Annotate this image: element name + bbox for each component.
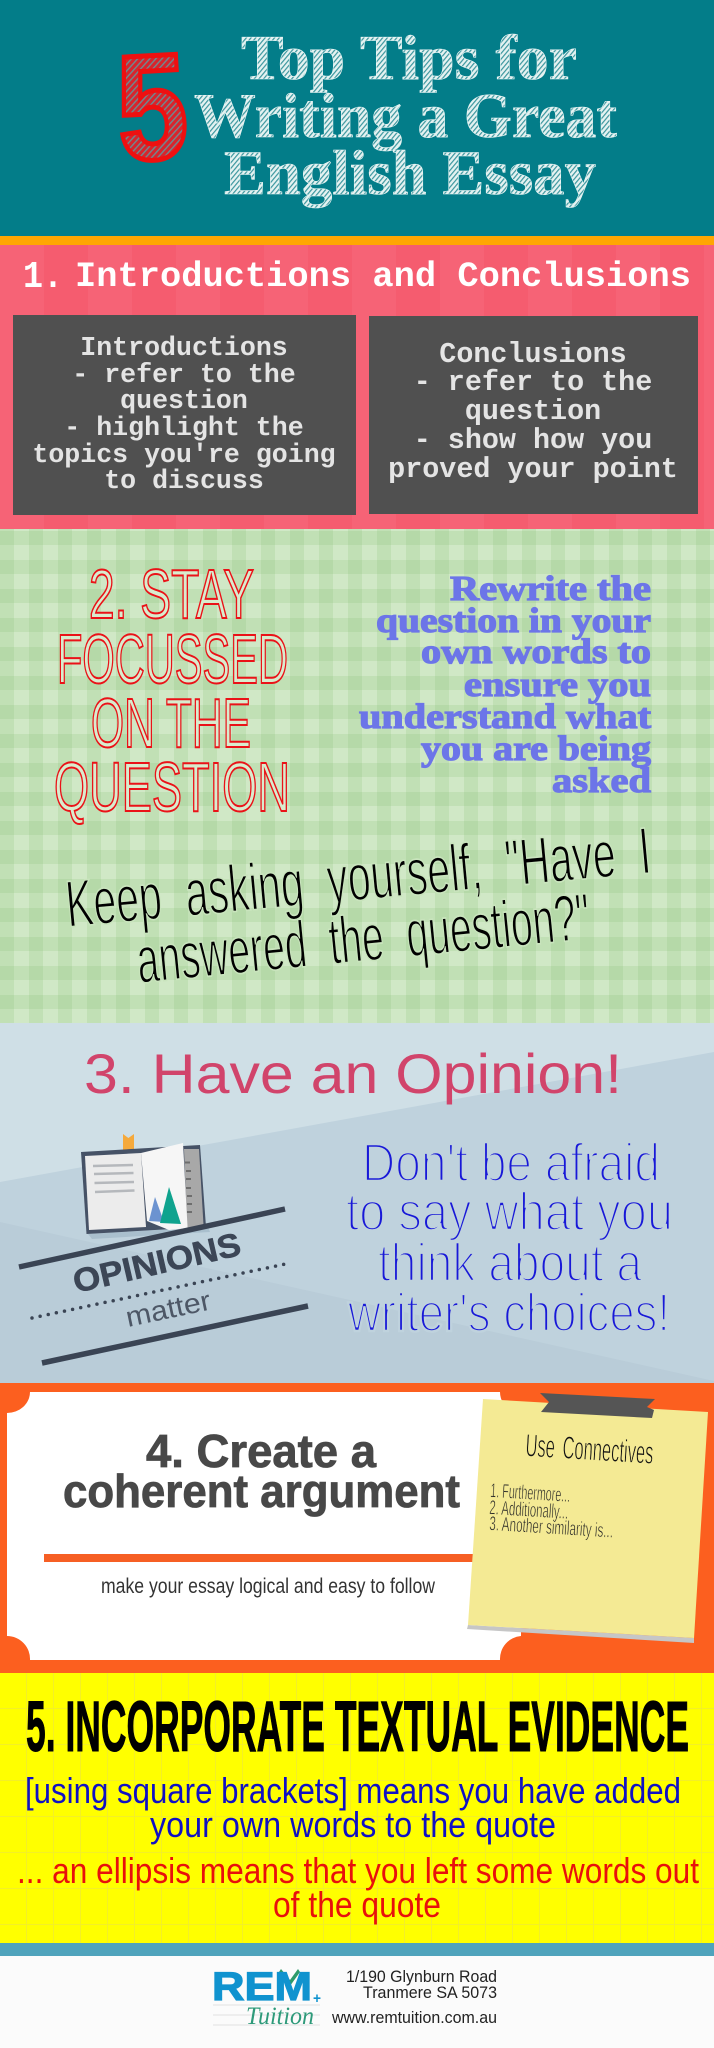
box: conclusions: - refer to the bbox=[414, 366, 652, 399]
heading: tip 2 bbox=[54, 555, 290, 826]
contact details: Tranmere SA 5073 bbox=[363, 1983, 497, 2002]
logo: REM Tuition bbox=[212, 1965, 321, 2030]
badge: opinions matter: OPINIONS bbox=[69, 1225, 244, 1300]
sticky note bbox=[467, 1393, 708, 1643]
box: introductions: topics you're going bbox=[32, 440, 336, 470]
box: conclusions bbox=[369, 316, 698, 514]
contact details: www.remtuition.com.au bbox=[331, 2008, 497, 2027]
text: rewrite the question: asked bbox=[552, 761, 652, 800]
text: don't be afraid: think about a bbox=[378, 1233, 643, 1293]
box: introductions: - refer to the bbox=[72, 360, 296, 390]
box: conclusions: Conclusions bbox=[439, 338, 627, 371]
box: introductions: - highlight the bbox=[64, 413, 304, 443]
contact details: 1/190 Glynburn Road bbox=[346, 1967, 497, 1986]
heading: tip 4 bbox=[63, 1425, 460, 1517]
title bbox=[194, 23, 617, 208]
box: conclusions: proved your point bbox=[388, 453, 678, 486]
heading: tip 1: 1. bbox=[23, 256, 63, 299]
panel: footer bbox=[0, 1956, 714, 2048]
text: square brackets bbox=[25, 1770, 681, 1845]
logo: REM Tuition: + bbox=[313, 1990, 321, 2007]
text: ellipsis bbox=[17, 1850, 699, 1925]
icon: open book bbox=[81, 1134, 210, 1239]
box: introductions: to discuss bbox=[104, 466, 264, 496]
card: ticket bbox=[7, 1392, 521, 1660]
text: rewrite the question bbox=[359, 569, 652, 800]
panel: header bbox=[0, 0, 714, 236]
note list: 3. Another similarity is... bbox=[489, 1513, 614, 1543]
logo: REM Tuition: Tuition bbox=[246, 2003, 314, 2030]
text: don't be afraid: Don't be afraid bbox=[362, 1133, 660, 1193]
title: English Essay bbox=[224, 138, 596, 208]
panel: tip 1 introductions and conclusions bbox=[0, 245, 714, 529]
title: Top Tips for bbox=[241, 23, 577, 93]
heading: tip 4: 4. Create a bbox=[146, 1425, 376, 1477]
heading: tip 2: FOCUSSED bbox=[57, 620, 288, 698]
text: rewrite the question: you are being bbox=[421, 729, 652, 768]
box: conclusions: - show how you bbox=[414, 424, 652, 457]
note list: 1. Furthermore... bbox=[490, 1480, 571, 1507]
text: ellipsis: of the quote bbox=[273, 1884, 441, 1925]
note list bbox=[489, 1480, 614, 1543]
text: rewrite the question: own words to bbox=[421, 632, 651, 671]
logo: REM Tuition: REM bbox=[212, 1965, 312, 2009]
text: square brackets: your own words to the quote bbox=[150, 1804, 556, 1845]
panel: tip 4 coherent argument bbox=[0, 1383, 714, 1673]
panel: tip 5 incorporate textual evidence bbox=[0, 1673, 714, 1943]
text: rewrite the question: Rewrite the bbox=[450, 569, 651, 608]
heading: tip 4: coherent argument bbox=[63, 1465, 460, 1517]
box: introductions: question bbox=[120, 386, 248, 416]
text: rewrite the question: understand what bbox=[359, 697, 651, 736]
numeral 5: 5 bbox=[113, 21, 191, 193]
badge: opinions matter: matter bbox=[123, 1285, 213, 1333]
heading: tip 2: QUESTION bbox=[54, 748, 290, 826]
text: rewrite the question: ensure you bbox=[464, 665, 651, 704]
text: don't be afraid: to say what you bbox=[346, 1182, 673, 1242]
heading: tip 2: 2. STAY bbox=[89, 555, 254, 633]
box: introductions bbox=[13, 315, 356, 515]
title: Writing a Great bbox=[194, 81, 617, 151]
panel: tip 2 stay focussed on the question bbox=[0, 529, 714, 1023]
box: introductions: Introductions bbox=[80, 333, 288, 363]
heading: tip 1: Introductions and Conclusions bbox=[75, 257, 691, 297]
badge: opinions matter bbox=[19, 1209, 308, 1363]
contact details bbox=[331, 1967, 497, 2027]
heading: tip 2: ON THE bbox=[91, 684, 251, 762]
box: conclusions: question bbox=[465, 395, 601, 428]
note list: 2. Additionally... bbox=[489, 1497, 569, 1524]
text: make your essay logical: make your essay logical and easy to follow bbox=[101, 1575, 436, 1598]
panel: tip 3 have an opinion bbox=[0, 1023, 714, 1383]
heading: tip 3: 3. Have an Opinion! bbox=[84, 1042, 622, 1105]
text: keep asking yourself bbox=[62, 813, 654, 997]
text: rewrite the question: question in your bbox=[376, 601, 651, 640]
text: don't be afraid bbox=[346, 1133, 673, 1343]
